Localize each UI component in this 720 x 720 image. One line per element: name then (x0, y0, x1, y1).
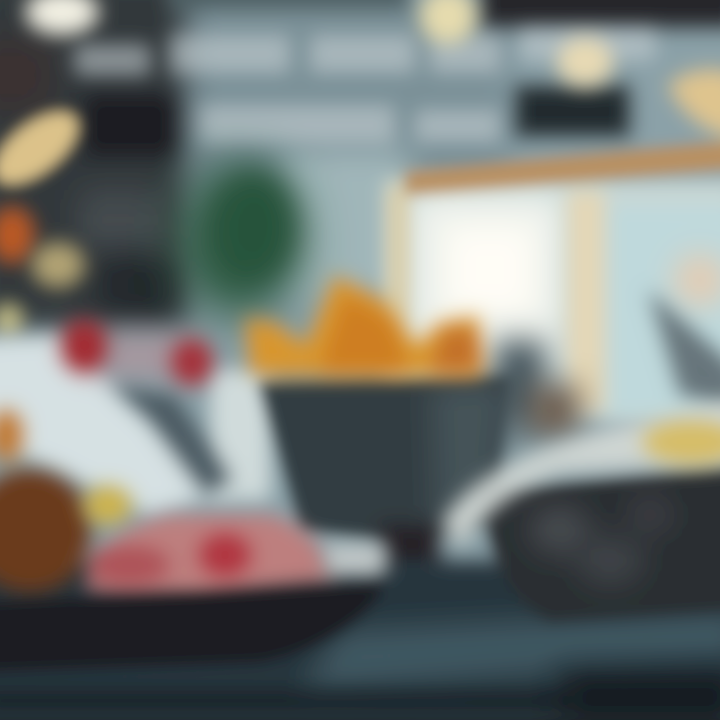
left dark shelf items (0, 95, 180, 336)
white counter with red berries (0, 320, 270, 515)
blurred title text smudge (75, 30, 655, 143)
green plant (176, 166, 300, 318)
bottom table (0, 560, 720, 720)
dark bowl with white rim (442, 400, 720, 622)
top lights (26, 0, 720, 140)
plate with meat (0, 409, 385, 672)
dark cup with orange chips (245, 275, 510, 575)
window and shelf (385, 140, 720, 435)
